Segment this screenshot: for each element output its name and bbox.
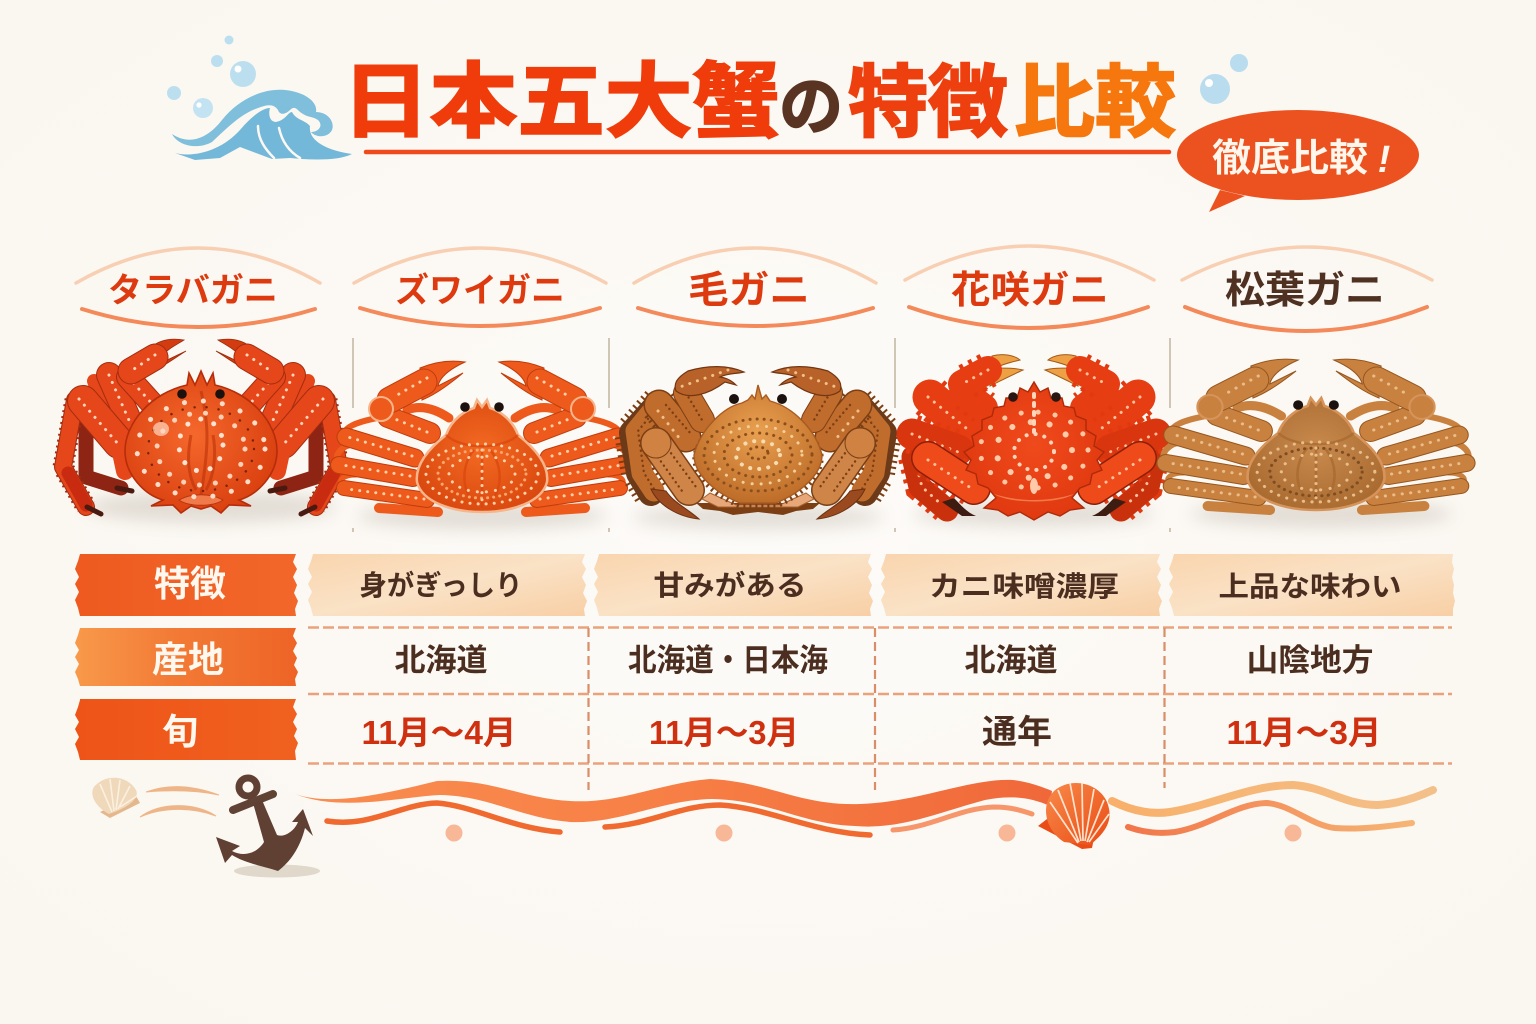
row header: 特徴 xyxy=(75,554,298,616)
crab illustration: 毛ガニ xyxy=(632,367,884,530)
row: 産地 values: 北海道 xyxy=(394,643,488,678)
title: 日本五大蟹 xyxy=(342,57,780,148)
wave band: main orange xyxy=(295,779,1052,827)
decorative streaks xyxy=(140,787,219,817)
species label: 松葉ガニ: 松葉ガニ xyxy=(1225,270,1385,312)
cell: タラバガニ 特徴 xyxy=(308,554,587,616)
crab illustration: タラバガニ xyxy=(63,339,339,523)
crab illustration: 花咲ガニ xyxy=(912,355,1156,527)
crab illustration: ズワイガニ xyxy=(337,361,627,530)
row: 旬 values: 11月～4月 xyxy=(362,714,516,751)
row: 旬 values: 通年 xyxy=(982,713,1052,750)
row: 産地 values: 北海道 xyxy=(964,643,1058,678)
row header: 旬: 旬 xyxy=(162,711,198,752)
cell: タラバガニ 特徴: 身がぎっしり xyxy=(360,569,522,601)
title: 特徴 xyxy=(848,58,1008,147)
row: 旬 values: 11月～3月 xyxy=(649,714,799,751)
row: 旬 values xyxy=(362,713,1382,751)
decorative dots xyxy=(446,824,1302,842)
species label: 毛ガニ xyxy=(634,248,876,326)
title xyxy=(342,57,1176,148)
row: 旬 values: 11月～3月 xyxy=(1226,714,1382,751)
row header: 産地: 産地 xyxy=(152,639,224,680)
species label: ズワイガニ xyxy=(354,248,606,326)
cell: ズワイガニ 特徴: 甘みがある xyxy=(654,569,806,601)
row: 産地 values: 山陰地方 xyxy=(1246,643,1374,678)
cell: 松葉ガニ 特徴 xyxy=(1169,554,1455,616)
callout: 徹底比較 xyxy=(1177,110,1419,212)
icon: wave and bubbles xyxy=(167,36,352,160)
cell: 花咲ガニ 特徴 xyxy=(881,554,1162,616)
cell: ズワイガニ 特徴 xyxy=(594,554,873,616)
crab illustration: 松葉ガニ xyxy=(1163,359,1469,528)
title underline xyxy=(366,150,1169,154)
row: 産地 values xyxy=(394,643,1374,678)
wave lines: secondary orange xyxy=(327,803,1032,835)
callout: 徹底比較: 徹底比較 xyxy=(1212,138,1368,180)
icon: pale scallop shell xyxy=(92,778,140,818)
wave lines: right pale orange xyxy=(1112,785,1433,833)
species label: ズワイガニ: ズワイガニ xyxy=(395,271,565,310)
species label: 松葉ガニ xyxy=(1182,247,1432,331)
title: 比較 xyxy=(1014,58,1176,147)
row: 産地 values: 北海道・日本海 xyxy=(628,643,828,678)
cell: 花咲ガニ 特徴: カニ味噌濃厚 xyxy=(929,571,1119,602)
species label: タラバガニ: タラバガニ xyxy=(108,272,278,310)
title: の xyxy=(779,71,843,143)
species label: 毛ガニ: 毛ガニ xyxy=(688,270,810,312)
row header: 特徴: 特徴 xyxy=(154,563,226,604)
icon: orange scallop shell xyxy=(1038,783,1110,849)
row header: 産地 xyxy=(75,628,298,686)
species label: タラバガニ xyxy=(76,248,320,327)
species label: 花咲ガニ xyxy=(905,246,1154,328)
row header: 旬 xyxy=(75,699,298,760)
cell: 松葉ガニ 特徴: 上品な味わい xyxy=(1218,571,1402,602)
icon: anchor xyxy=(216,778,320,878)
callout: 徹底比較: ! xyxy=(1378,139,1390,181)
bubbles: right of title xyxy=(1200,54,1248,104)
species label: 花咲ガニ: 花咲ガニ xyxy=(951,270,1109,312)
